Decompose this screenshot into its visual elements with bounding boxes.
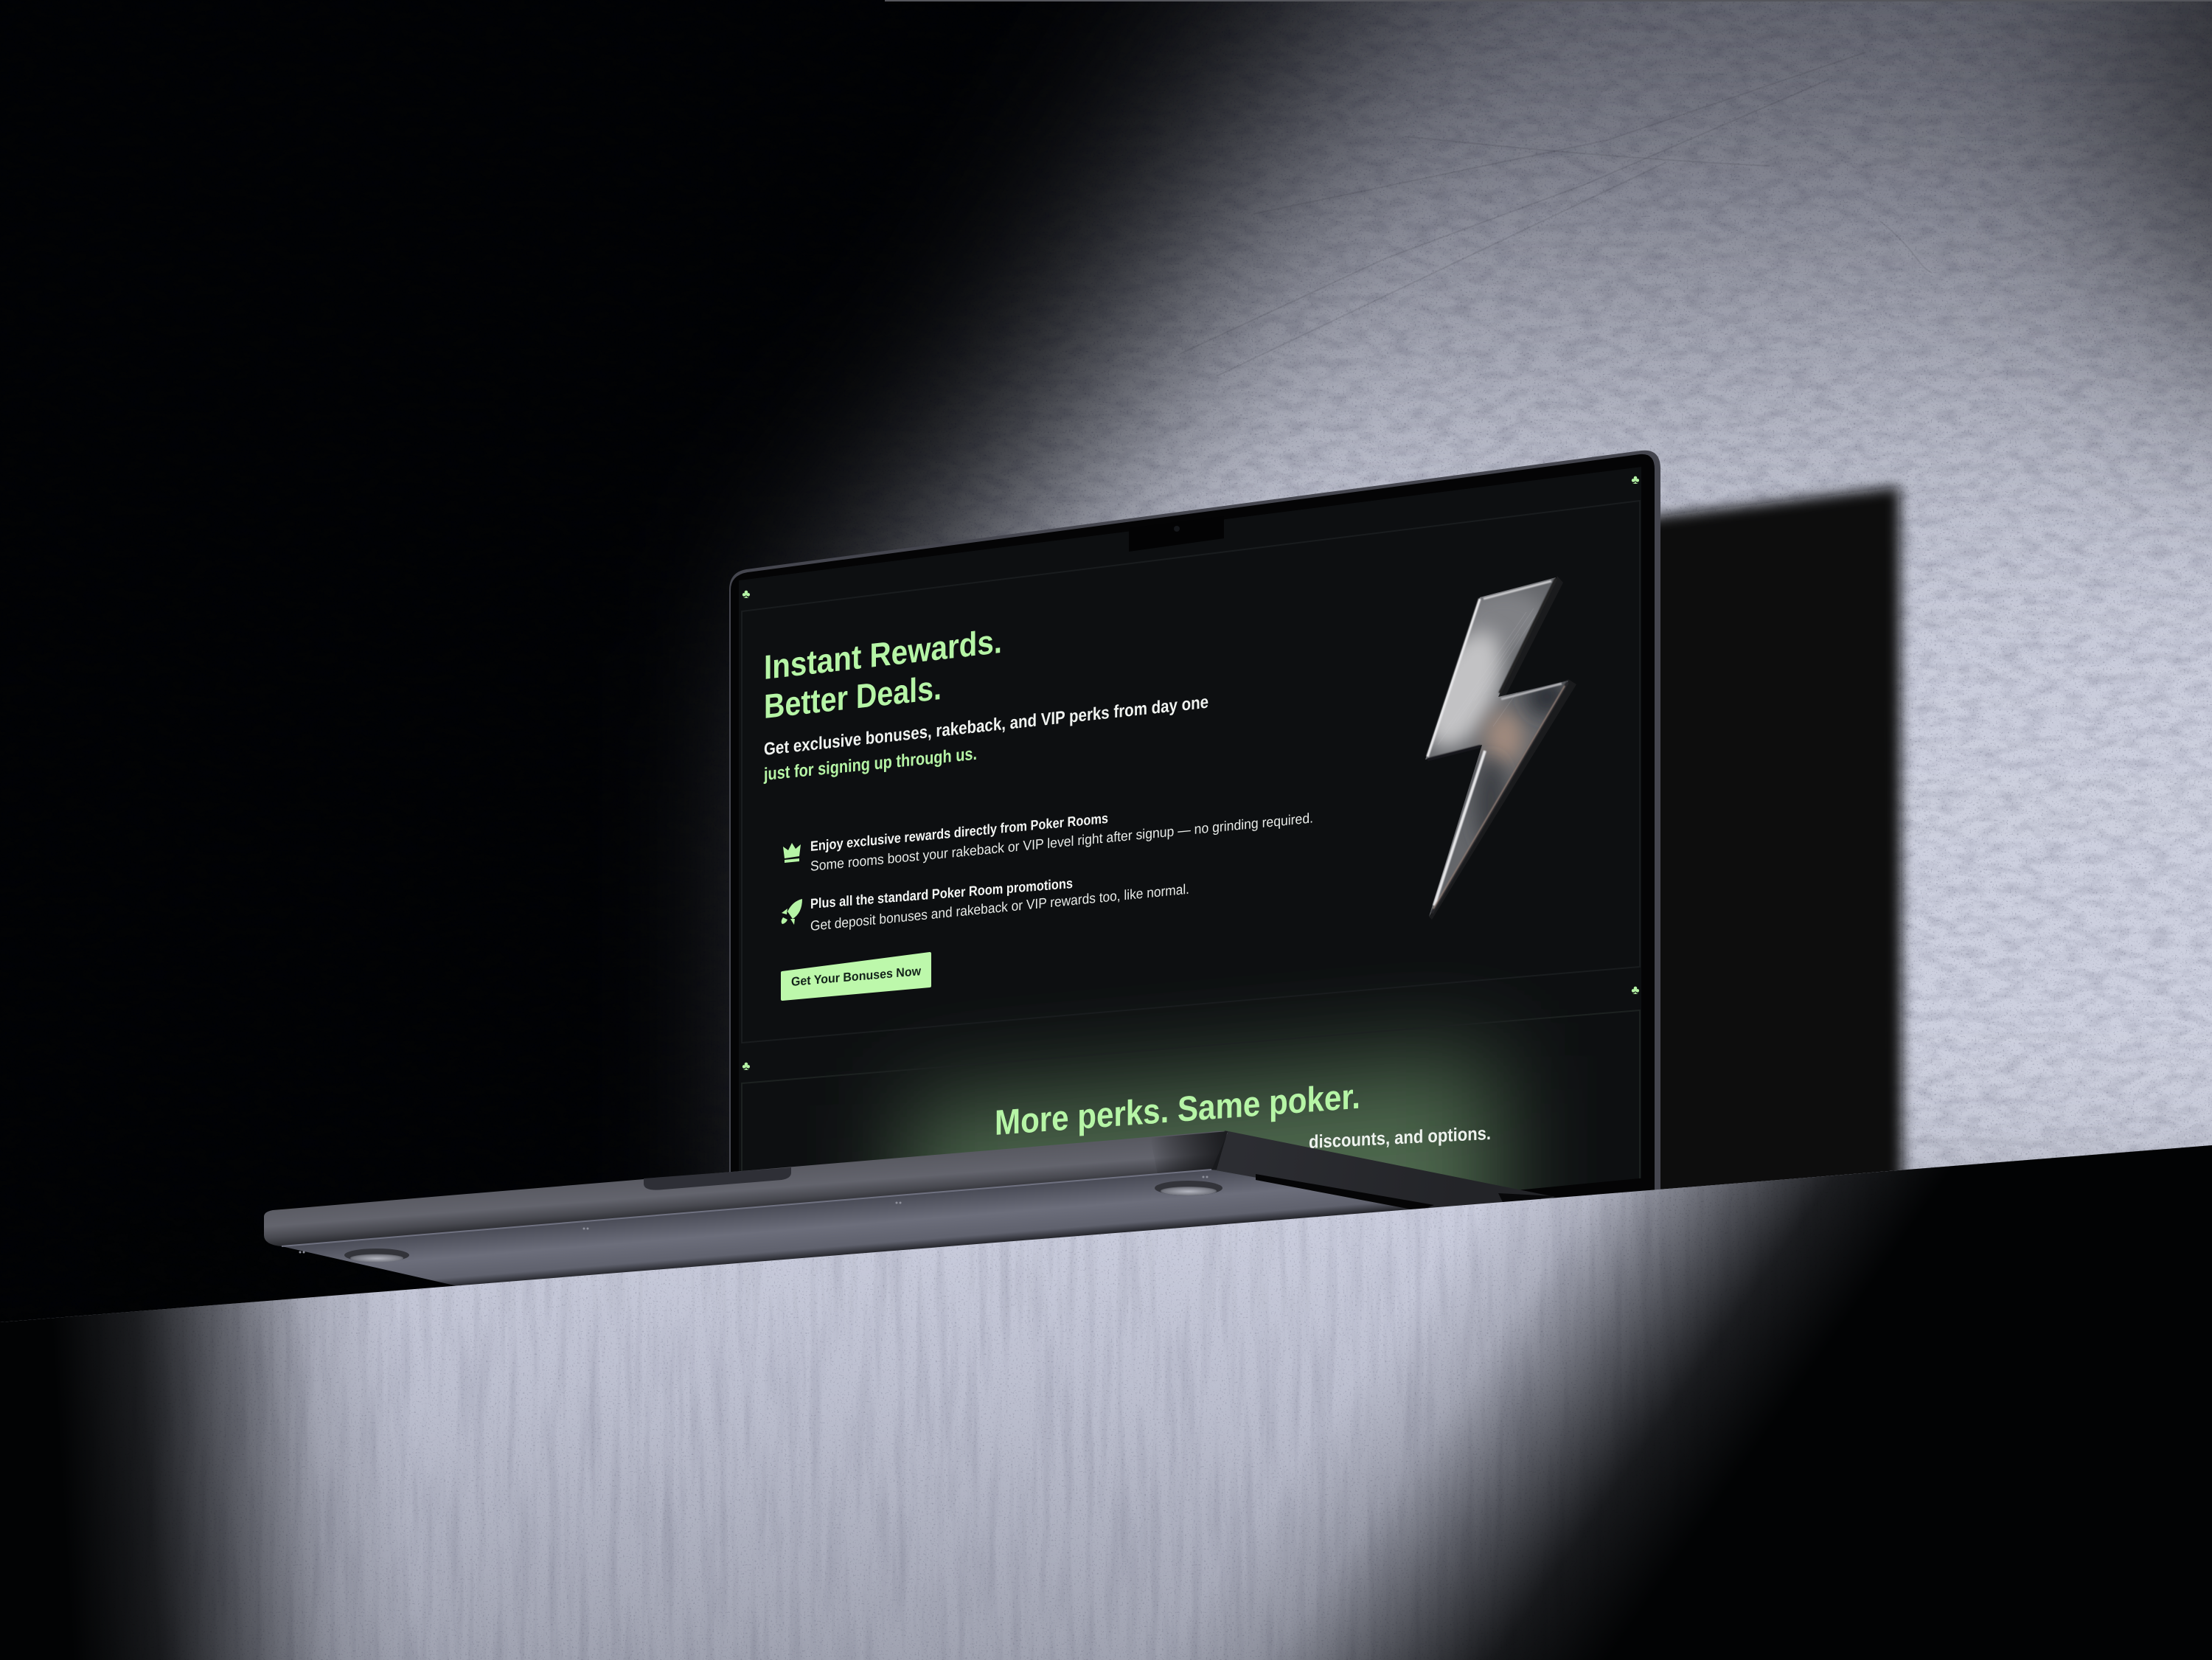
screen background (739, 467, 1641, 1209)
vent slot (1256, 1174, 1434, 1211)
lit concrete ledge block (0, 1145, 2212, 1660)
screen content (739, 467, 1641, 1298)
top edge highlight (885, 0, 2212, 1)
base right side face (1211, 1131, 1555, 1217)
heading: Instant Rewards: Instant Rewards. (764, 622, 1002, 687)
laptop cast shadow (1622, 487, 1902, 1209)
perk 2 title: Plus all the standard Poker Room promotions (810, 876, 1073, 912)
button (782, 954, 930, 999)
icon: club marks: ♣ (1631, 473, 1640, 487)
heading: More perks: More perks. Same poker. (995, 1077, 1360, 1143)
rear slit (1498, 1193, 1555, 1205)
subheading line: Get exclusive bonuses, rakeback, and VIP perks from day one (764, 692, 1208, 760)
screw marks (299, 1175, 1208, 1254)
heading: Better Deals: Better Deals. (764, 668, 942, 726)
base front face (264, 1131, 1228, 1246)
button: Get Your Bonuses Now (791, 964, 922, 989)
laptop (264, 451, 1660, 1298)
notch with camera (1129, 516, 1224, 552)
subheading green line: just for signing up through us. (763, 744, 977, 785)
base underside panel (282, 1170, 1435, 1287)
card outline: hero (742, 501, 1640, 1043)
icon: club marks: ♣ (742, 587, 751, 601)
card outline: perks (742, 1010, 1640, 1224)
laptop base (264, 1131, 1555, 1287)
icon: chrome lightning bolt (1408, 576, 1576, 920)
bottom bezel strip (1401, 1177, 1655, 1224)
laptop lid and bezel (729, 451, 1660, 1209)
perk 1 text: Some rooms boost your rakeback or VIP level right after signup — no grinding required. (810, 810, 1313, 875)
icon: club marks: ♣ (742, 1059, 751, 1073)
concrete wall with light beam (664, 0, 2212, 1190)
icon: club marks: ♣ (1631, 983, 1640, 997)
hinge notch (644, 1167, 791, 1190)
icon: rocket (782, 899, 802, 925)
rear foot (344, 1249, 409, 1263)
perk 1 title: Enjoy exclusive rewards directly from Poker Rooms (810, 811, 1108, 855)
front foot (1155, 1181, 1222, 1195)
seam highlight (282, 1169, 1211, 1247)
icon: club marks (742, 473, 1640, 1073)
icon: crown (783, 843, 801, 863)
perk 2 text: Get deposit bonuses and rakeback or VIP rewards too, like normal. (810, 882, 1189, 934)
green glow panel (907, 1055, 1497, 1298)
perks subtext: discounts, and options. (1309, 1123, 1491, 1153)
corner shading (1150, 1131, 1228, 1174)
